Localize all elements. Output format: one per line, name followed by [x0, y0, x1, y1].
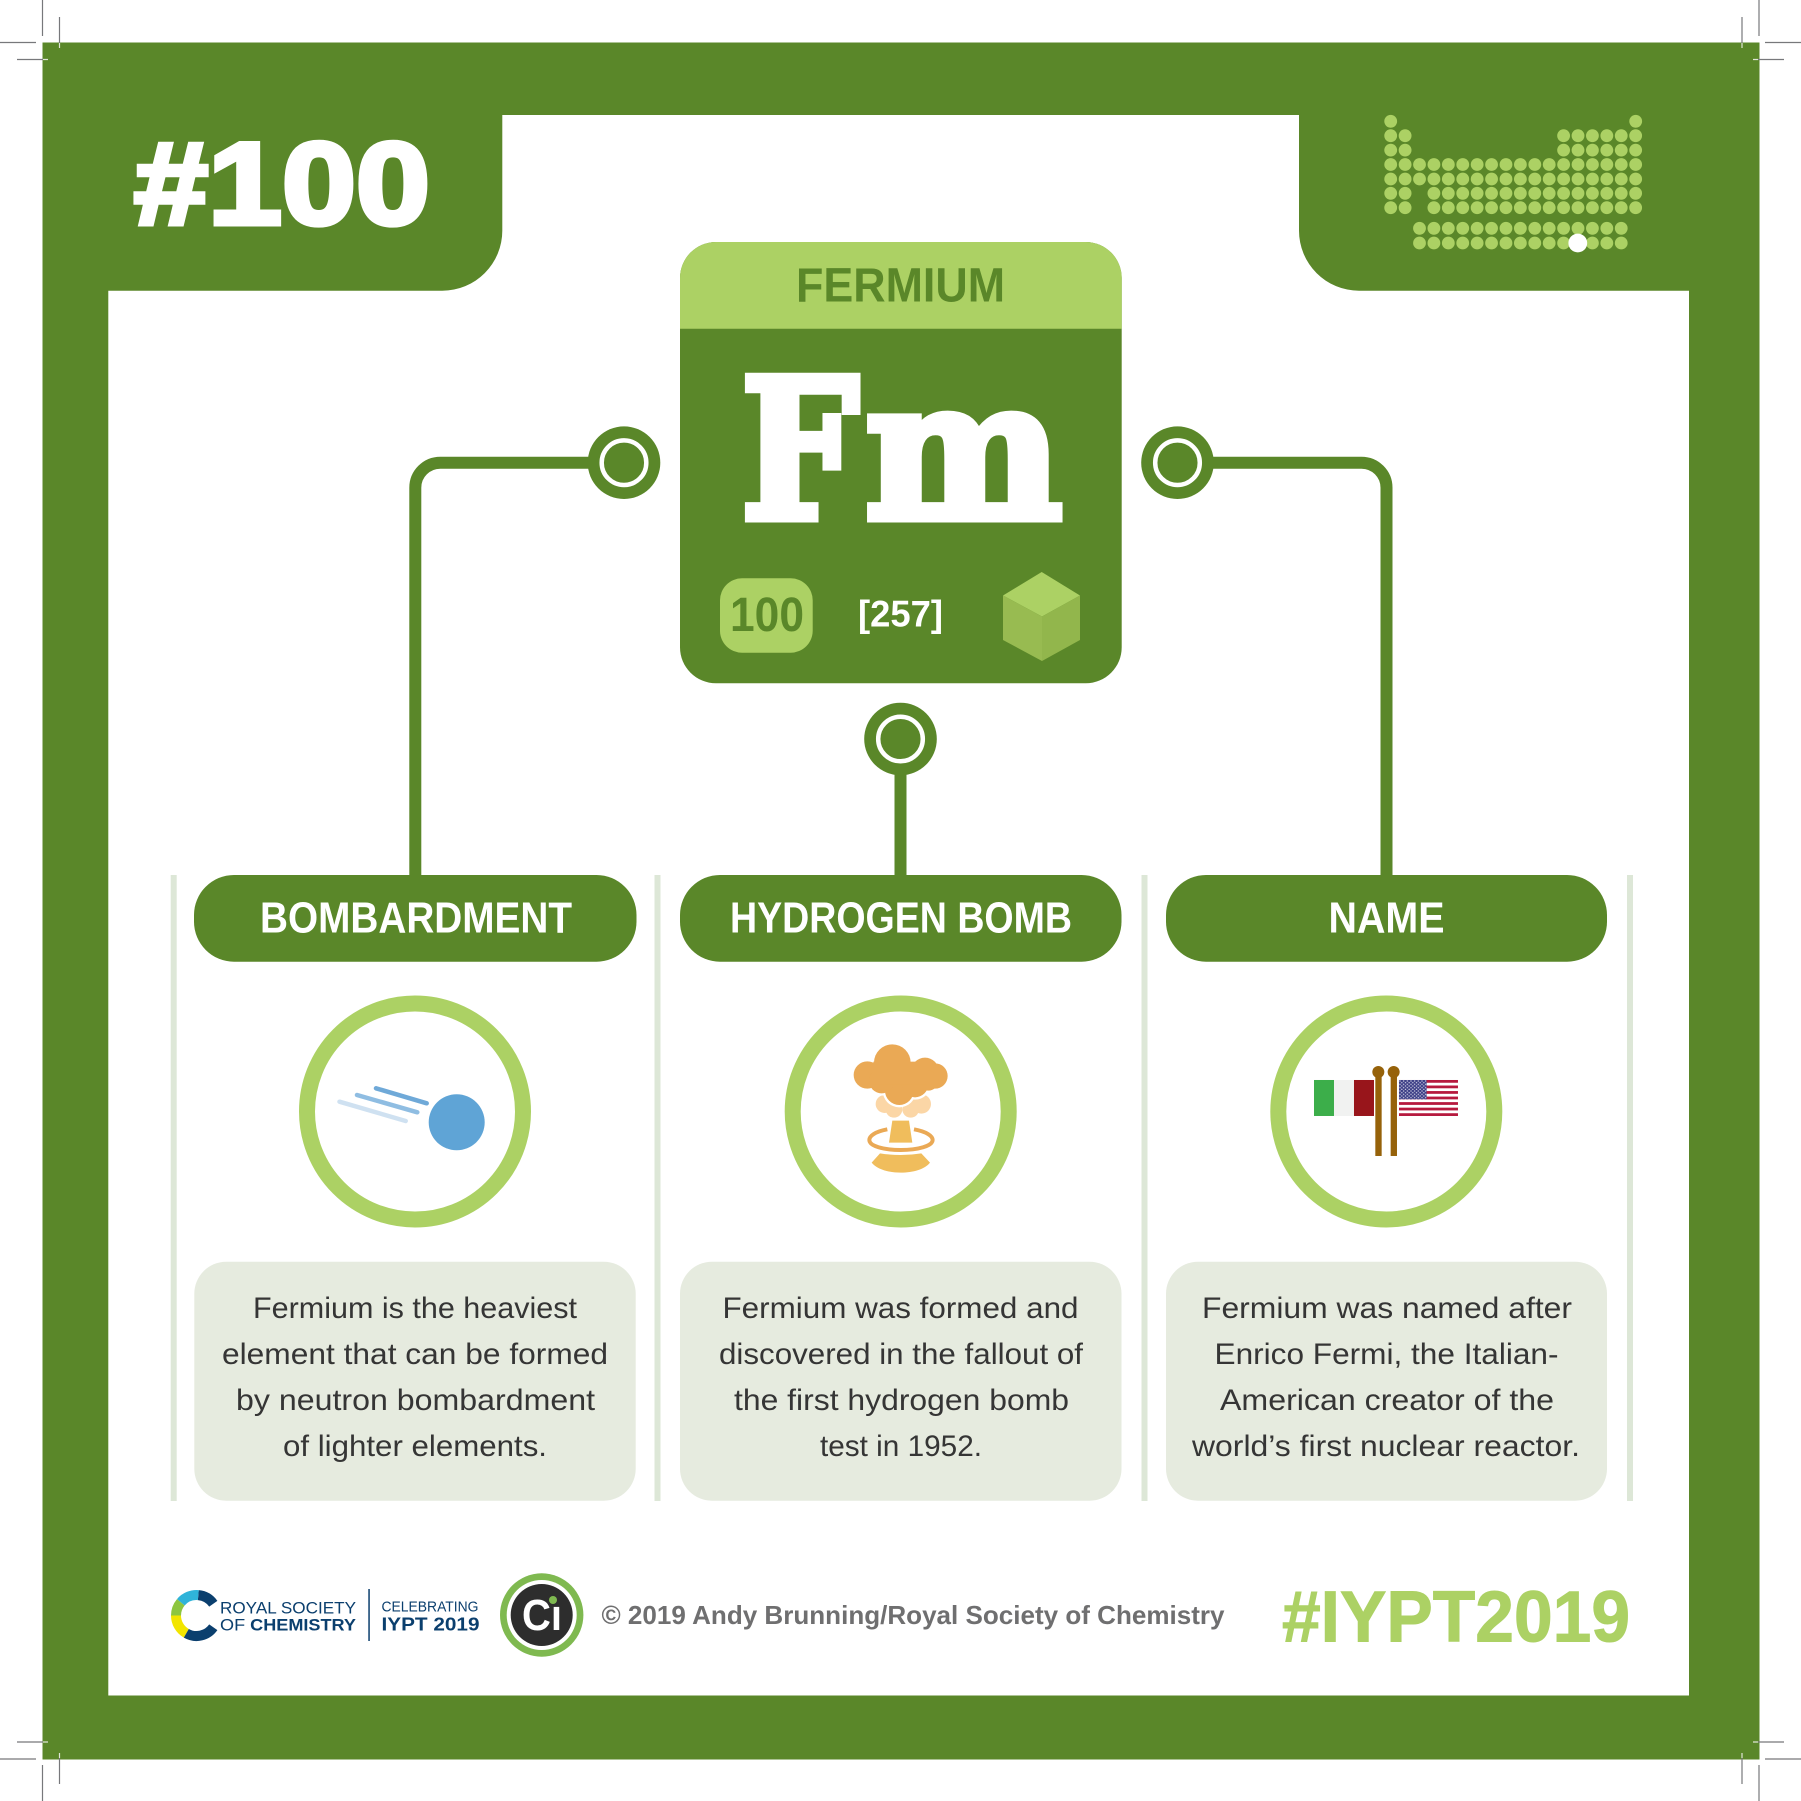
hashtag: #IYPT2019	[1282, 1578, 1630, 1658]
element symbol: F	[741, 338, 859, 564]
text block: bombardment: Fermium is the heaviest	[253, 1292, 578, 1325]
panel: name	[1166, 875, 1607, 1501]
text block: hydrogen bomb: discovered in the fallout of	[719, 1338, 1084, 1371]
element number heading: #100	[134, 118, 430, 249]
element name: FERMIUM	[796, 260, 1005, 313]
icon: neutron projectile	[307, 1004, 523, 1220]
panel: bombardment	[194, 875, 636, 1501]
heading: bombardment	[194, 875, 636, 962]
connector: name	[1141, 426, 1386, 876]
atomic mass: [257]	[858, 594, 943, 635]
text block: name: Fermium was named after	[1202, 1292, 1572, 1325]
logo: Royal Society of Chemistry: ROYAL SOCIETY	[220, 1599, 356, 1617]
heading: name	[1166, 875, 1607, 962]
logo: Royal Society of Chemistry: CELEBRATING	[382, 1600, 478, 1616]
logo: Compound Interest: Cı	[522, 1591, 562, 1640]
heading: name: NAME	[1328, 894, 1444, 942]
text block: name: Enrico Fermi, the Italian-	[1214, 1338, 1558, 1371]
icon: Italian and American flags	[1278, 1004, 1494, 1220]
element symbol: m	[865, 337, 1062, 564]
connector: bombardment	[415, 426, 660, 876]
text block: hydrogen bomb: test in 1952.	[820, 1430, 982, 1463]
text block: hydrogen bomb: the first hydrogen bomb	[734, 1384, 1069, 1417]
icon: solid state cube	[1003, 572, 1080, 661]
element symbol	[741, 337, 1062, 564]
copyright: © 2019 Andy Brunning/Royal Society of Chemistry	[602, 1600, 1225, 1630]
icon: mushroom cloud	[793, 1004, 1009, 1220]
logo: Royal Society of Chemistry: OF CHEMISTRY	[220, 1617, 356, 1635]
connector: hydrogen bomb	[864, 703, 937, 876]
text block: hydrogen bomb: Fermium was formed and	[722, 1292, 1078, 1325]
atomic number badge	[720, 578, 813, 653]
panel: element card	[680, 242, 1122, 683]
heading: hydrogen bomb	[680, 875, 1122, 962]
heading: hydrogen bomb: HYDROGEN BOMB	[730, 894, 1072, 942]
text block: bombardment: of lighter elements.	[283, 1430, 547, 1463]
text block: name: American creator of the	[1220, 1384, 1554, 1417]
text block: bombardment: element that can be formed	[222, 1338, 608, 1371]
text block: bombardment: by neutron bombardment	[236, 1384, 596, 1417]
logo: Royal Society of Chemistry: IYPT 2019	[382, 1614, 480, 1635]
text block: name: world’s first nuclear reactor.	[1191, 1430, 1580, 1463]
text block: hydrogen bomb	[680, 1262, 1122, 1501]
panel: hydrogen bomb	[680, 875, 1122, 1501]
text block: name	[1166, 1262, 1607, 1501]
logo: Compound Interest	[500, 1573, 583, 1657]
logo: Royal Society of Chemistry	[176, 1589, 479, 1641]
periodic table locator	[1391, 121, 1636, 252]
text block: bombardment	[194, 1262, 636, 1501]
heading: bombardment: BOMBARDMENT	[260, 894, 572, 942]
atomic number badge: 100	[730, 589, 804, 642]
